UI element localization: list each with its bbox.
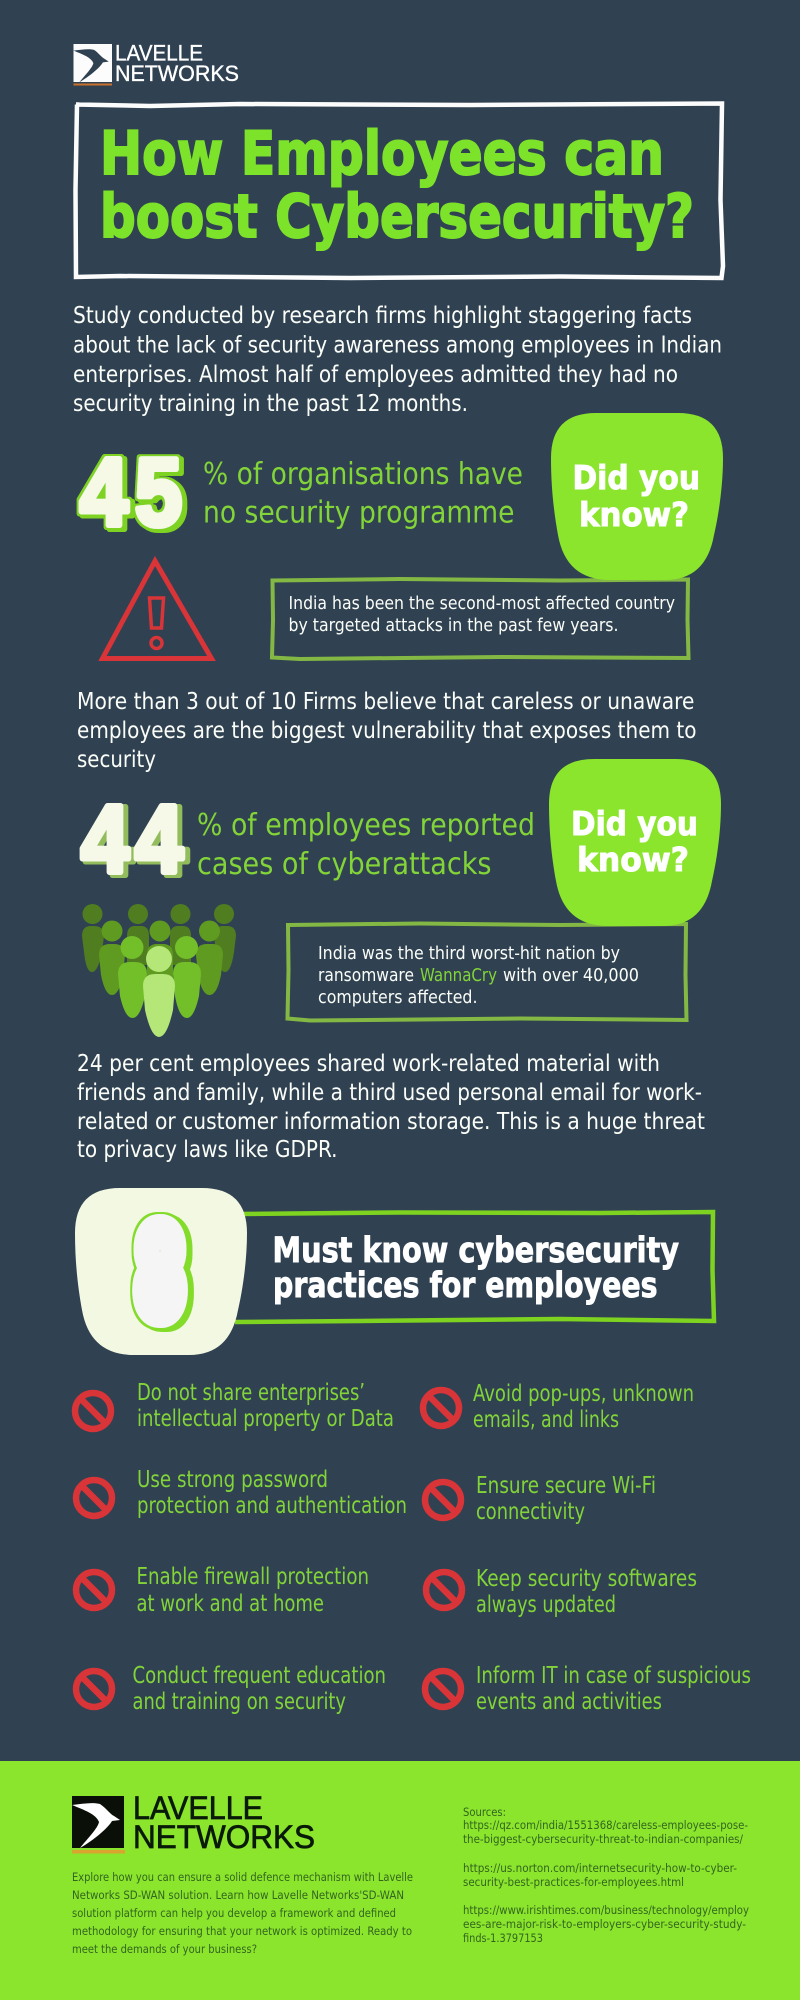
stat text: % of organisations have xyxy=(203,457,523,492)
callout: did you know 2: Did you xyxy=(571,804,698,843)
practice 2: emails, and links xyxy=(473,1407,619,1433)
footer description: meet the demands of your business? xyxy=(72,1942,257,1956)
icon: prohibited xyxy=(426,1572,462,1608)
practice 3: protection and authentication xyxy=(137,1493,407,1519)
practice 6 xyxy=(426,1566,697,1618)
logo wordmark: NETWORKS xyxy=(115,61,239,86)
practice 4: Ensure secure Wi-Fi xyxy=(476,1473,656,1499)
box frame xyxy=(288,924,686,1020)
logo wordmark xyxy=(133,1790,315,1855)
intro paragraph xyxy=(73,303,722,417)
stat text xyxy=(197,808,535,882)
stat text: no security programme xyxy=(203,496,514,530)
sources: security-best-practices-for-employees.html xyxy=(463,1875,684,1889)
logo wordmark: NETWORKS xyxy=(133,1819,315,1855)
callout: did you know 1 xyxy=(551,413,723,580)
sources: Sources: xyxy=(463,1805,506,1819)
section heading: 8 practices xyxy=(75,1188,714,1355)
sources: https://us.norton.com/internetsecurity-how-to-cyber- xyxy=(463,1861,737,1875)
stat text: cases of cyberattacks xyxy=(197,847,492,882)
practice 5 xyxy=(76,1564,369,1617)
fact box: second-most affected xyxy=(272,579,688,659)
box text: India has been the second-most affected country xyxy=(288,593,675,614)
sources: the-biggest-cybersecurity-threat-to-indian-companies/ xyxy=(463,1832,743,1846)
icon: prohibited xyxy=(425,1671,461,1707)
big number 8: 8 xyxy=(138,1203,182,1341)
paragraph: shared material: to privacy laws like GDPR. xyxy=(77,1137,338,1163)
number tile xyxy=(75,1188,247,1355)
footer description: Networks SD-WAN solution. Learn how Lavelle Networks'SD-WAN xyxy=(72,1888,404,1902)
icon: group of people xyxy=(82,904,236,1037)
icon: prohibited xyxy=(425,1482,461,1518)
box text xyxy=(318,943,639,1008)
heading text: Must know cybersecurity xyxy=(272,1231,679,1271)
practice 3: Use strong password xyxy=(137,1467,328,1493)
intro paragraph: enterprises. Almost half of employees admitted they had no xyxy=(73,362,678,388)
callout: did you know 2 xyxy=(549,759,721,926)
paragraph: careless employees xyxy=(77,689,696,773)
logo wordmark: LAVELLE xyxy=(133,1790,263,1826)
intro paragraph: security training in the past 12 months. xyxy=(73,391,468,417)
paragraph: careless employees: employees are the biggest vulnerability that exposes them to xyxy=(77,718,696,744)
sources: https://qz.com/india/1551368/careless-employees-pose- xyxy=(463,1818,748,1832)
big number 44: 4 xyxy=(81,786,129,893)
icon: warning triangle xyxy=(102,561,212,658)
big number 44: 4 xyxy=(135,786,183,893)
callout: did you know 1: know? xyxy=(579,495,689,534)
paragraph: shared material: related or customer information storage. This is a huge threat xyxy=(77,1109,705,1135)
heading text xyxy=(272,1231,679,1306)
footer description: Explore how you can ensure a solid defence mechanism with Lavelle xyxy=(72,1870,413,1884)
intro paragraph: Study conducted by research firms highlight staggering facts xyxy=(73,303,692,329)
practice 5: Enable firewall protection xyxy=(136,1564,369,1590)
big number 45 xyxy=(80,439,182,546)
title text: boost Cybersecurity? xyxy=(100,182,694,252)
paragraph: shared material xyxy=(77,1051,705,1163)
practice 4: connectivity xyxy=(476,1499,585,1525)
practice 3 xyxy=(76,1467,407,1519)
icon: bird on white square xyxy=(74,44,112,86)
box text: WannaCry xyxy=(420,965,497,986)
box text: with over 40,000 xyxy=(503,965,639,986)
logo: footer Lavelle Networks xyxy=(72,1790,315,1855)
heading frame xyxy=(235,1212,714,1322)
logo wordmark: LAVELLE xyxy=(115,40,203,66)
big number 44 xyxy=(81,786,183,893)
box text: computers affected. xyxy=(318,987,478,1008)
callout: did you know 1: Did you xyxy=(572,458,700,497)
practice 6: Keep security softwares xyxy=(476,1566,697,1592)
icon: prohibited xyxy=(76,1671,112,1707)
sources xyxy=(463,1805,749,1945)
practice 2: Avoid pop-ups, unknown xyxy=(473,1381,694,1407)
practice 1 xyxy=(75,1380,394,1432)
sources: ees-are-major-risk-to-employers-cyber-security-study- xyxy=(463,1917,746,1931)
box frame xyxy=(272,579,688,659)
fact box: WannaCry xyxy=(288,924,686,1020)
sources: https://www.irishtimes.com/business/technology/employ xyxy=(463,1903,749,1917)
heading text: practices for employees xyxy=(273,1266,658,1306)
practice 6: always updated xyxy=(476,1592,616,1618)
title frame xyxy=(76,104,723,278)
footer panel xyxy=(0,1761,800,2000)
footer description xyxy=(72,1870,413,1956)
icon: bird on black square xyxy=(72,1796,125,1854)
footer description: solution platform can help you develop a framework and defined xyxy=(72,1906,396,1920)
practice 7: Conduct frequent education xyxy=(132,1663,386,1689)
paragraph: careless employees: security xyxy=(77,747,156,773)
practice 8 xyxy=(425,1663,751,1715)
footer description: methodology for ensuring that your network is optimized. Ready to xyxy=(72,1924,412,1938)
icon: prohibited xyxy=(423,1390,459,1426)
big number 45: 4 xyxy=(80,439,128,546)
callout: did you know 2: know? xyxy=(577,840,689,879)
box text: India was the third worst-hit nation by xyxy=(318,943,620,964)
title panel xyxy=(76,104,723,278)
icon: prohibited xyxy=(76,1572,112,1608)
icon: prohibited xyxy=(76,1480,112,1516)
stat: 45 xyxy=(80,439,523,546)
stat text xyxy=(203,457,523,530)
logo: top Lavelle Networks xyxy=(74,40,239,86)
box text xyxy=(288,593,675,636)
paragraph: shared material: 24 per cent employees shared work-related material with xyxy=(77,1051,660,1077)
box text: ransomware xyxy=(318,965,414,986)
practice 7 xyxy=(76,1663,386,1715)
sources: finds-1.3797153 xyxy=(463,1931,543,1945)
practice 2 xyxy=(423,1381,694,1433)
stat text: % of employees reported xyxy=(197,808,535,843)
box text: by targeted attacks in the past few years. xyxy=(288,615,618,636)
logo wordmark xyxy=(115,40,239,86)
title text: How Employees can xyxy=(100,119,664,189)
big number 45: 5 xyxy=(135,439,182,546)
icon: prohibited xyxy=(75,1393,111,1429)
practice 4 xyxy=(425,1473,656,1525)
stat: 44 xyxy=(81,786,535,893)
practice 1: intellectual property or Data xyxy=(137,1406,394,1432)
title text xyxy=(100,119,694,252)
practice 1: Do not share enterprises’ xyxy=(137,1380,365,1406)
paragraph: shared material: friends and family, while a third used personal email for work- xyxy=(77,1080,702,1106)
practice 7: and training on security xyxy=(132,1689,346,1715)
practice 5: at work and at home xyxy=(136,1591,324,1617)
practice 8: events and activities xyxy=(476,1689,662,1715)
paragraph: careless employees: More than 3 out of 10 Firms believe that careless or unaware xyxy=(77,689,694,715)
